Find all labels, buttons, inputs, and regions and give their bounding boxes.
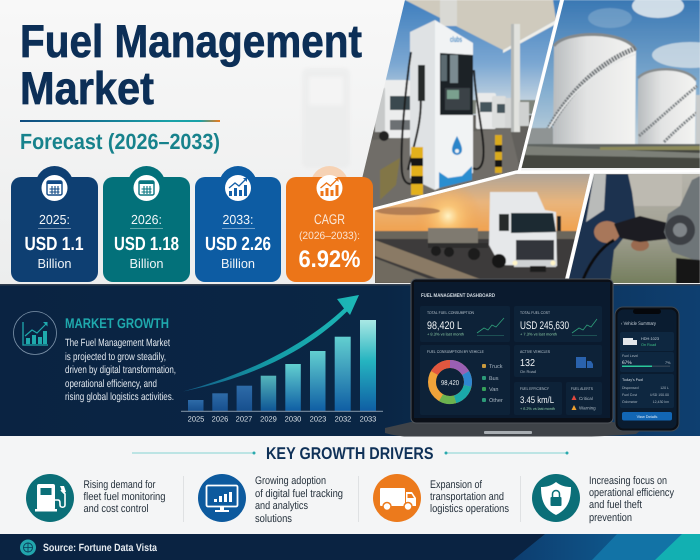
title [20,15,362,114]
stat card: 2026: 2026: [131,212,162,227]
stat card: 2026 [103,166,190,282]
bar chart: market growth 2025–2033: 2033 [360,414,376,424]
card: active vehicles: ACTIVE VEHICLES [520,349,550,354]
phone button: View Details [637,415,658,419]
bar chart: market growth 2025–2033: 2029 [260,414,277,424]
phone truck card: HDH-1023 [641,337,659,341]
photo: fuel pump with truck fleet [350,0,565,210]
trailer [428,228,478,243]
laptop dashboard [385,279,640,437]
cab [489,192,557,266]
card: fuel alerts [566,382,602,415]
driver 3: transportation and logistics: transportation and [430,491,504,503]
phone fuel details card: Odometer [622,400,638,404]
stat card: CAGR [286,166,373,282]
phone fuel details card: Dispensed [622,386,639,390]
icon: analytics monitor [198,474,246,522]
phone fuel details card: 12,430 km [653,400,669,404]
driver 2: digital fuel tracking [198,474,343,525]
driver 3: transportation and logistics: logistics operations [430,503,509,515]
title rule [20,120,220,122]
card: total fuel cost: TOTAL FUEL COST [520,310,550,315]
icon: shield with lock [532,474,580,522]
truck metal [664,176,700,262]
donut chart [432,364,468,400]
card: total fuel cost [514,306,602,342]
heading: key growth drivers [132,444,568,463]
stat card: 2025 [11,166,98,282]
title: Fuel Management [20,15,362,67]
laptop base [385,422,640,437]
bar chart: market growth 2025–2033: 2023 [310,414,326,424]
donut legend: Bus [489,376,499,382]
driver 1: fleet fuel monitoring: and cost control [84,503,148,515]
driver 2: digital fuel tracking: and analytics [255,500,308,512]
stat card: 2026: Billion [130,256,164,271]
card: active vehicles [514,345,602,377]
panel: key growth drivers [0,436,700,534]
heading: market growth: MARKET GROWTH [65,315,169,331]
stat card: 2033: 2033: [222,212,254,227]
hand [594,221,620,243]
card: active vehicles: 132 [520,358,535,369]
stat card: 2025: 2025: [39,212,70,227]
driver 4: efficiency and theft prevention [532,474,674,524]
donut legend [482,364,503,404]
dashboard heading: FUEL MANAGEMENT DASHBOARD [421,293,495,299]
phone truck card [620,332,674,351]
phone: vehicle summary [615,307,679,431]
icon: rising bars [225,175,251,201]
left truck [382,80,411,138]
card: fuel alerts: FUEL ALERTS [571,386,593,391]
photo: fuel pump with truck fleet: clubs [450,35,462,44]
stat card: 2033 [195,166,281,282]
arrow: growth trend [183,295,359,392]
stat card: CAGR: (2026–2033): [299,230,360,242]
card: total fuel consumption: 98,420 L [427,320,462,332]
driver 1: fleet fuel monitoring: fleet fuel monitoring [84,491,166,503]
phone fuel level card [620,352,674,372]
driver 4: efficiency and theft prevention: and fuel theft [589,499,642,511]
stat card: 2025: USD 1.1 [24,234,84,255]
ground [515,144,700,150]
driver 4: efficiency and theft prevention: operational efficiency [589,487,674,499]
icon: fuel pump [26,474,74,522]
card: fuel efficiency: FUEL EFFICIENCY [520,386,549,391]
driver 2: digital fuel tracking: solutions [255,513,292,525]
photo: hand refuelling with nozzle [565,170,700,285]
tank 1 [553,34,636,146]
icon: growth chart in circle [14,312,56,354]
card: consumption donut: 98,420 [441,380,459,387]
icon: calendar [134,175,160,201]
phone fuel details card: Fuel Cost [622,393,637,397]
card: total fuel consumption: + 8.3% vs last month [427,332,464,336]
bollards [411,147,423,195]
bar chart: market growth 2025–2033: 2025 [188,414,204,424]
card: total fuel consumption [420,306,510,342]
phone truck card: On Road [641,343,656,347]
market growth paragraph: The Fuel Management Market [65,337,170,349]
driver 1: fleet fuel monitoring: Rising demand for [84,479,156,491]
card: consumption donut: FUEL CONSUMPTION BY VEHICLE [427,349,484,354]
jacket [566,174,636,285]
market growth paragraph: is projected to grow steadily, [65,351,166,363]
card: fuel efficiency [514,382,562,415]
hoses [400,51,412,186]
phone fuel details card [620,374,674,408]
phone fuel level card: 67% [622,360,632,366]
subtitle: Forecast (2026–2033) [20,129,220,154]
ghost fuel pump watermark [302,68,350,168]
market growth paragraph: rising global logistics activities. [65,391,174,403]
card: fuel alerts: Warning [579,406,596,410]
stat card: 2033: USD 2.26 [205,234,271,255]
laptop screen [411,279,613,423]
bar chart: market growth 2025–2033: 2032 [335,414,351,424]
card: total fuel consumption: TOTAL FUEL CONSUMPTION [427,310,474,315]
top background [0,0,700,284]
market growth paragraph [65,337,176,403]
donut legend: Van [489,387,498,393]
donut legend: Truck [489,364,503,370]
driver 3: transportation and logistics: Expansion of [430,479,483,491]
phone fuel level card: 7% [665,361,671,365]
driver 2: digital fuel tracking: Growing adoption [255,475,326,487]
driver 4: efficiency and theft prevention: Increasing focus on [589,475,667,487]
card: fuel alerts: Critical [579,396,593,401]
card: total fuel cost: USD 245,630 [520,320,569,332]
driver 4: efficiency and theft prevention: prevention [589,512,632,524]
pump side face [410,20,435,190]
icon: rising bars [316,175,342,201]
phone fuel details card: 120 L [660,386,669,390]
phone fuel details card: Today's Fuel [622,378,643,382]
photo dividers [374,0,700,284]
market growth paragraph: driven by digital transformation, [65,364,176,376]
icon: globe [20,540,36,556]
photo: truck at sunset [375,174,590,283]
driver 1: fleet fuel monitoring [26,474,166,522]
card: fuel efficiency: + 6.2% vs last month [520,406,555,411]
icon: calendar [42,175,68,201]
footer band [0,534,700,560]
stat card: CAGR: 6.92% [298,246,360,273]
title: Market [20,62,154,114]
card: consumption donut [420,345,510,415]
stat card: CAGR: CAGR [314,211,345,227]
stat card: 2026: USD 1.18 [114,234,179,255]
bar chart: market growth 2025–2033: 2026 [212,414,228,424]
pump front face [435,20,473,190]
market growth paragraph: operational efficiency, and [65,378,157,390]
heading: key growth drivers: KEY GROWTH DRIVERS [266,444,434,463]
right trucks [476,93,529,129]
photo: storage tanks [515,0,700,170]
card: fuel efficiency: 3.45 km/L [520,395,554,406]
nozzle [614,216,676,242]
stat card: 2025: Billion [38,256,72,271]
donut legend: Other [489,398,503,404]
icon: blue truck [576,357,593,368]
canopy [405,0,556,50]
footer source [20,540,157,556]
card: active vehicles: On Road [520,369,536,374]
bar chart: market growth 2025–2033 [181,320,383,424]
driver 3: transportation and logistics [373,474,509,522]
column dividers [184,476,520,522]
stat card: 2033: Billion [221,256,255,271]
driver 2: digital fuel tracking: of digital fuel tracking [255,488,343,500]
tank 2 [638,70,696,144]
icon: delivery truck [373,474,421,522]
footer source: Source: Fortune Data Vista [43,542,157,554]
bar chart: market growth 2025–2033: 2027 [236,414,252,424]
panel: market growth band [0,284,700,436]
bar chart: market growth 2025–2033: 2030 [285,414,301,424]
phone fuel level card: Fuel Level [622,354,638,358]
phone fuel details card: USD 150.00 [650,393,669,397]
phone: vehicle summary: ‹ Vehicle Summary [621,321,656,327]
card: total fuel cost: + 7.3% vs last month [520,332,557,336]
